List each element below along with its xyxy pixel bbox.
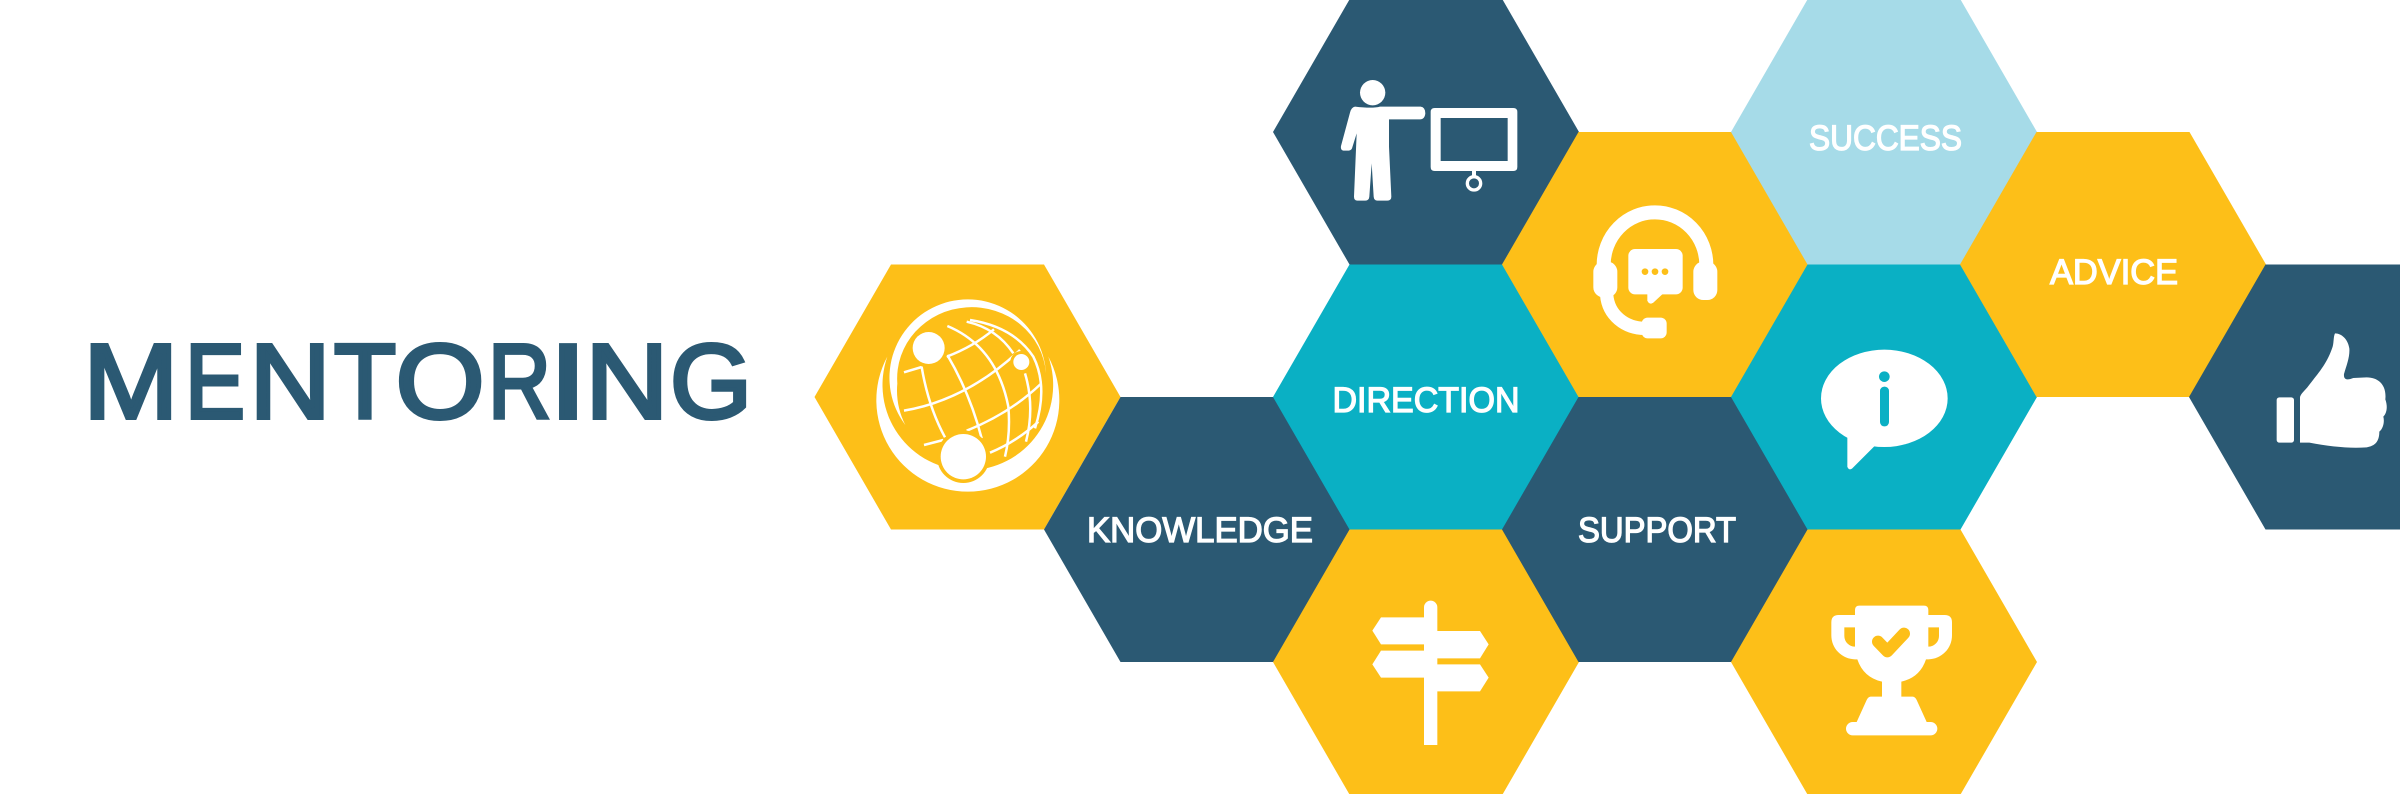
title: T: [334, 323, 396, 441]
title: O: [396, 323, 485, 441]
label: support: SUPPORT: [1578, 511, 1736, 550]
title: E: [185, 323, 245, 441]
label: advice: ADVICE: [2050, 253, 2178, 292]
label: success: SUCCESS: [1809, 119, 1962, 158]
title: R: [488, 323, 551, 441]
panel: presenter hexagon: [1273, 0, 1579, 264]
panel: support hexagon: [1502, 397, 1808, 662]
title: N: [585, 323, 668, 441]
panel: success hexagon: [1731, 0, 2037, 264]
title: M: [83, 323, 178, 441]
panel: headset hexagon: [1502, 132, 1808, 397]
title: G: [670, 323, 752, 441]
panel: info hexagon: [1731, 264, 2037, 530]
icon: info speech bubble: [1821, 350, 1948, 469]
label: knowledge: KNOWLEDGE: [1087, 511, 1313, 550]
icon: thumbs up: [2277, 333, 2387, 448]
title: I: [549, 323, 587, 441]
icon: headset with chat bubble: [1593, 212, 1717, 338]
label: direction: DIRECTION: [1332, 381, 1520, 420]
icon: trophy with check mark: [1831, 606, 1952, 735]
icon: presenter and screen: [1341, 80, 1517, 201]
title: N: [250, 323, 331, 441]
icon: globe with people: [876, 299, 1059, 492]
icon: signpost: [1372, 601, 1489, 745]
panel: signpost hexagon: [1273, 530, 1579, 794]
panel: advice hexagon: [1960, 132, 2266, 397]
panel: globe hexagon: [814, 264, 1120, 530]
panel: thumbs up hexagon: [2189, 264, 2400, 530]
panel: trophy hexagon: [1731, 530, 2037, 794]
panel: direction hexagon: [1273, 264, 1579, 530]
panel: knowledge hexagon: [1044, 397, 1350, 662]
